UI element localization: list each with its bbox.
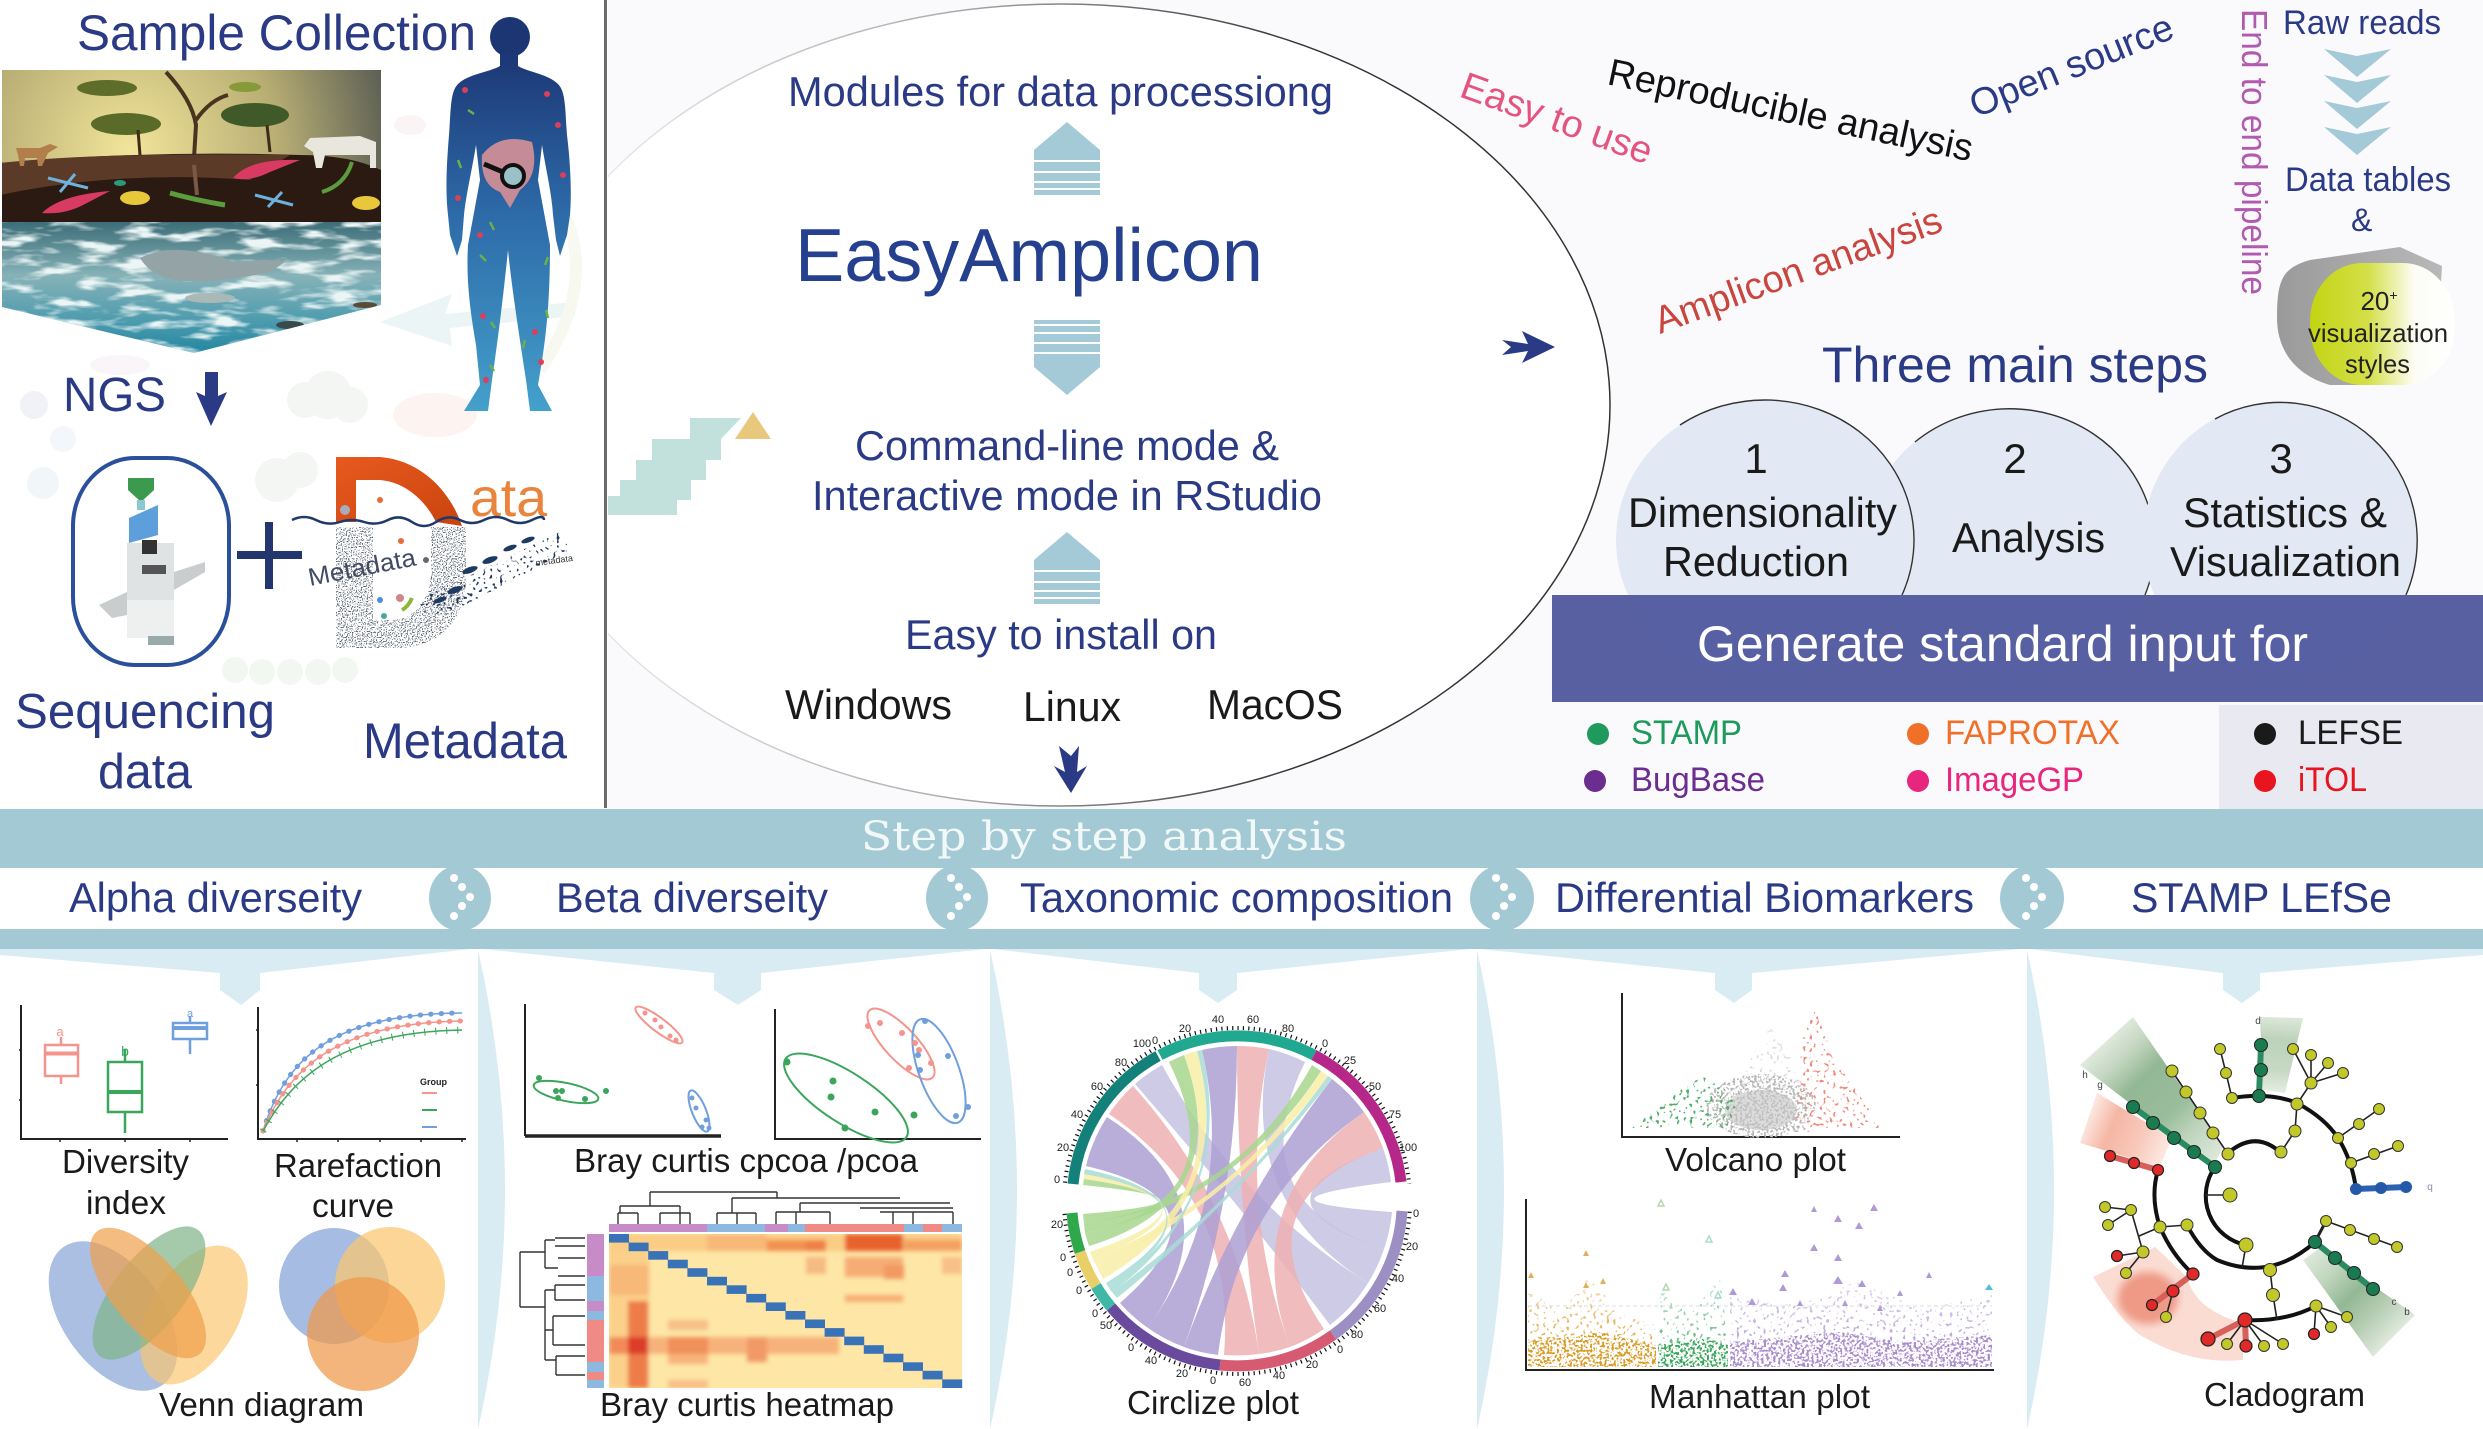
tick labels: 20 [1406,1241,1418,1253]
decoration: stairs with triangle [608,412,771,515]
funnels under header [0,949,2483,1005]
chart: bray curtis heatmap [520,1192,962,1388]
heading: sample collection: Sample Collection [77,5,476,61]
step 1 text: Dimensionality [1628,489,1897,536]
red nodes [2104,1150,2320,1352]
arrow: down to analysis [1054,746,1087,793]
icon: data logo: Metadata [306,544,418,592]
tick labels: 40 [1071,1109,1083,1121]
icon: visualization cylinder: styles [2345,349,2410,379]
label: rarefaction curve: Rarefaction [274,1147,442,1184]
plus sign [237,522,302,589]
text: MacOS: MacOS [1207,681,1343,728]
heading: STAMP LEfSe: STAMP LEfSe [2131,874,2392,921]
tick labels: 25 [1344,1055,1356,1067]
step 2 circle [1865,408,2155,682]
step 3 text: Statistics & [2183,489,2387,536]
clade letters: d [2255,1016,2261,1027]
tick labels: 60 [1091,1081,1103,1093]
thin edges [2105,1049,2398,1346]
panel: EasyAmplicon modules [608,68,1555,793]
tick labels: 20 [1306,1359,1318,1371]
right section background [608,0,2483,808]
icon: data logo [292,457,573,648]
tick labels: 20 [1051,1219,1063,1231]
tick labels: 0 [1152,1035,1158,1047]
text: Linux: Linux [1023,683,1121,730]
text: easy to use: Easy to use [1455,65,1658,173]
green nodes [2126,1038,2380,1296]
arrow: striped up lower [1034,532,1100,604]
sector arcs [1072,1036,1402,1366]
tick labels: 0 [1128,1342,1134,1354]
text: interactive mode: Interactive mode in RStudio [812,472,1322,519]
banner: generate standard input [1552,595,2483,702]
label: venn diagram: Venn diagram [159,1386,364,1423]
heading: alpha diversity: Alpha diverseity [69,874,362,921]
clade shading [2080,1017,2415,1361]
chart: volcano plot [1622,993,1900,1138]
clade letters: c [2392,1297,2396,1308]
chart: diversity boxplot [19,1005,228,1142]
tick labels: 20 [1176,1368,1188,1380]
tools legend: iTOL [2298,761,2367,799]
tick labels: 40 [1273,1370,1285,1382]
chart: constrained PCoA [525,1002,721,1136]
panel: features word cloud [1455,6,2275,342]
tools legend: LEFSE [2298,714,2403,752]
text: ampersand: & [2351,202,2372,238]
arrow: striped down [1034,320,1100,395]
tick labels: 80 [1282,1023,1294,1035]
tick labels: 0 [1092,1308,1098,1320]
arrow: right to features [1502,331,1555,363]
tick labels: 50 [1100,1320,1112,1332]
heading: beta diversity: Beta diverseity [556,874,828,921]
tools legend: ImageGP [1945,761,2084,799]
panel: alpha diversity [19,1005,466,1423]
tick labels: 75 [1389,1109,1401,1121]
icon: visualization cylinder: visualization [2308,318,2448,348]
step 2 text: 2 [2003,435,2027,482]
tick labels: 0 [1413,1208,1419,1220]
chart: rarefaction curve: Group [420,1077,447,1087]
text: Windows: Windows [785,681,952,728]
panel: pipeline output [2277,4,2455,385]
tick labels: 20 [1057,1142,1069,1154]
text: command-line mode: Command-line mode & [855,422,1279,469]
tick labels: 0 [1054,1174,1060,1186]
tick labels [1051,1014,1419,1389]
step 3 text: Visualization [2170,538,2401,585]
arrow: striped up [1034,122,1100,195]
banner: step by step analysis [0,809,2483,868]
panel: beta diversity [520,999,981,1423]
tools legend: FAPROTAX [1945,714,2120,752]
label: metadata: Metadata [363,713,567,769]
label: bray curtis pcoa: Bray curtis cpcoa /pcoa [574,1142,919,1179]
tick labels: 100 [1399,1142,1417,1154]
label: sequencing data: Sequencing [15,685,275,739]
step 3 text: 3 [2269,435,2293,482]
label: bray curtis heatmap: Bray curtis heatmap [600,1386,894,1423]
label: rarefaction curve [274,1147,442,1224]
text: raw reads: Raw reads [2283,4,2441,42]
clade letters: b [2404,1307,2410,1318]
chart: diversity boxplot: a [56,1024,64,1039]
panel: differential biomarkers [1526,993,1994,1415]
step 3 circle [2143,402,2417,678]
icon: chevrons [2324,49,2391,155]
faint background decoration [20,115,576,685]
label: sequencing data: data [98,745,193,799]
banner: generate standard input: Generate standard input for [1697,616,2308,672]
step 1 text: Reduction [1663,538,1849,585]
label: circlize plot: Circlize plot [1127,1384,1299,1421]
section header bar [0,865,2483,1429]
chart: four-set venn [23,1208,270,1414]
divider line [604,0,607,808]
separators between panels [478,950,2054,1429]
title: EasyAmplicon: EasyAmplicon [795,213,1263,297]
icon: sequencer in rounded box [73,458,229,665]
panel: sample collection and inputs [0,5,576,799]
text: amplicon analysis: Amplicon analysis [1649,199,1948,342]
icon: visualization cylinder: + [2389,287,2398,303]
yellow nodes [2100,1044,2404,1352]
illustration: environment samples [0,70,381,357]
text: open source: Open source [1964,6,2180,126]
clade letters [2082,1016,2433,1318]
blue nodes [2350,1181,2412,1195]
icon: dog [16,144,58,166]
tick labels: 60 [1374,1303,1386,1315]
tick labels: 60 [1247,1014,1259,1026]
heading: three main steps: Three main steps [1822,337,2208,393]
label: rarefaction curve: curve [312,1187,394,1224]
icon: visualization cylinder: 20 [2360,286,2389,316]
clade letters: g [2097,1080,2103,1091]
chart: manhattan plot [1526,1199,1994,1370]
ellipse: EasyAmplicon core [510,4,1610,806]
text: end to end pipeline: End to end pipeline [2234,9,2275,295]
icon: data logo: ata [470,468,548,528]
label: volcano plot: Volcano plot [1665,1141,1846,1178]
tick labels: 20 [1179,1023,1191,1035]
step 2 text: Analysis [1952,514,2105,561]
label: diversity index: index [86,1184,167,1221]
black arcs [2154,1096,2356,1320]
tick labels: 50 [1369,1081,1381,1093]
clade letters: q [2427,1182,2433,1193]
tick ring [1064,1028,1410,1374]
label: diversity index [62,1143,189,1221]
thick clade edges [2110,1045,2406,1346]
tick labels: 100 [1133,1038,1151,1050]
chart: circlize chord diagram [1051,1014,1422,1389]
text: modules for data processing: Modules for data processiong [788,68,1333,115]
tick labels: 40 [1145,1355,1157,1367]
label: manhattan plot: Manhattan plot [1649,1378,1870,1415]
step 2 text [1952,435,2105,561]
panel: STAMP LEfSe [2080,1016,2433,1413]
icon: visualization cylinder [2277,247,2455,385]
chart: rarefaction curve [256,1007,466,1142]
tick labels: 80 [1115,1057,1127,1069]
tick labels: 0 [1322,1038,1328,1050]
chart: three-set venn [279,1227,445,1391]
chart: cladogram [2080,1016,2433,1361]
tick labels: 0 [1067,1267,1073,1279]
tick labels: 80 [1351,1329,1363,1341]
tick labels: 0 [1337,1344,1343,1356]
icon: cow [304,136,376,168]
illustration: human body [446,17,571,411]
arrow: NGS down [196,372,227,426]
label: diversity index: Diversity [62,1143,189,1180]
heading: taxonomic composition: Taxonomic composition [1020,874,1453,921]
tools legend [1584,705,2483,809]
chart: PCoA [772,999,981,1158]
banner: step by step analysis: Step by step analysis [861,814,1347,860]
tick labels: 0 [1076,1285,1082,1297]
tools legend: STAMP [1631,714,1742,752]
step 3 text [2170,435,2401,585]
label: NGS: NGS [63,369,166,422]
chart: diversity boxplot: b [121,1043,129,1059]
label: sequencing data [15,685,275,799]
tick labels: 0 [1210,1375,1216,1387]
step 1 text [1628,435,1897,585]
microbes in soil [42,191,110,213]
step 1 circle [1616,400,1914,680]
connector circles [429,865,2064,931]
icon: data logo: metadata [535,553,573,568]
clade letters: h [2082,1070,2088,1081]
tick labels: 60 [1239,1377,1251,1389]
tick labels: 40 [1392,1273,1404,1285]
panel: three main steps [1552,337,2483,809]
chart: diversity boxplot: a [187,1008,194,1020]
text: easy to install: Easy to install on [905,611,1217,658]
text: data tables: Data tables [2285,161,2451,199]
tick labels: 0 [1060,1252,1066,1264]
text: reproducible analysis: Reproducible analysis [1604,52,1977,170]
chord ribbons [1083,1046,1392,1356]
step 1 text: 1 [1744,435,1768,482]
panel: taxonomic composition [1051,1014,1422,1421]
heading: differential biomarkers: Differential Biomarkers [1555,874,1974,921]
tools legend: BugBase [1631,761,1765,799]
label: cladogram: Cladogram [2204,1376,2365,1413]
tick labels: 40 [1212,1014,1224,1026]
